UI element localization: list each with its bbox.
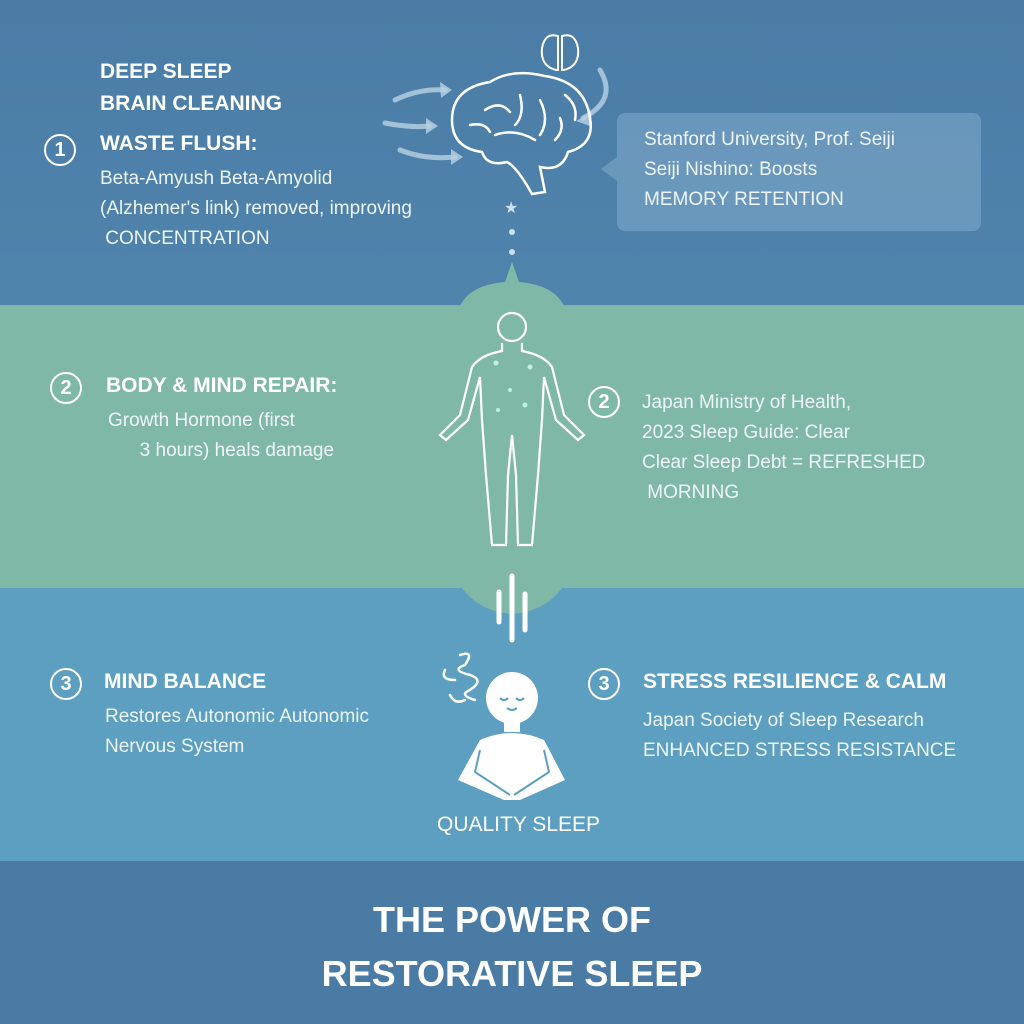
star and dots: ★ xyxy=(504,200,518,217)
item 1 left: waste flush: WASTE FLUSH: xyxy=(100,132,258,155)
item 2 right: Japan Ministry: Japan Ministry of Health, xyxy=(642,392,851,413)
item 3 left: mind balance xyxy=(50,668,369,757)
item 2 right: Japan Ministry: MORNING xyxy=(647,482,739,503)
item 2 left: body & mind repair xyxy=(50,372,337,461)
band: top blue xyxy=(0,0,1024,306)
item 3 left: mind balance: Restores Autonomic Autonomic xyxy=(105,706,369,727)
band: green xyxy=(0,305,1024,589)
item 3 right: stress resilience xyxy=(588,668,956,761)
item 2 left: body & mind repair: 2 xyxy=(60,377,72,399)
title: RESTORATIVE SLEEP xyxy=(322,953,702,994)
item 2 right: Japan Ministry: 2 xyxy=(598,391,610,413)
item 1 left: waste flush xyxy=(44,132,412,249)
item 3 right: stress resilience: ENHANCED STRESS RESISTANCE xyxy=(643,740,956,761)
icon: brain with arrows xyxy=(382,34,609,196)
item 2 right: Japan Ministry: 2023 Sleep Guide: Clear xyxy=(642,422,850,443)
label: quality sleep: QUALITY SLEEP xyxy=(437,813,600,836)
item 3 left: mind balance: Nervous System xyxy=(105,736,244,757)
icon: meditating person xyxy=(442,652,565,800)
icon: human body xyxy=(438,312,586,546)
callout: Stanford: MEMORY RETENTION xyxy=(644,189,844,210)
heading: deep sleep brain cleaning: DEEP SLEEP xyxy=(100,60,232,83)
callout: Stanford: Seiji Nishino: Boosts xyxy=(644,159,817,180)
callout: Stanford: Stanford University, Prof. Seiji xyxy=(644,129,895,150)
item 3 left: mind balance: MIND BALANCE xyxy=(104,670,266,693)
callout: Stanford xyxy=(617,113,981,231)
item 2 right: Japan Ministry: Clear Sleep Debt = REFRESHED xyxy=(642,452,926,473)
item 3 left: mind balance: 3 xyxy=(60,673,72,695)
item 3 right: stress resilience: 3 xyxy=(598,673,610,695)
title: THE POWER OF xyxy=(373,899,651,940)
item 1 left: waste flush: 1 xyxy=(54,139,66,161)
heading: deep sleep brain cleaning xyxy=(100,60,282,115)
item 2 left: body & mind repair: Growth Hormone (first xyxy=(108,410,295,431)
item 2 left: body & mind repair: 3 hours) heals damage xyxy=(140,440,334,461)
item 2 left: body & mind repair: BODY & MIND REPAIR: xyxy=(106,374,337,397)
band: bottom xyxy=(0,861,1024,1024)
band: light blue xyxy=(0,588,1024,862)
item 1 left: waste flush: Beta-Amyush Beta-Amyolid xyxy=(100,168,332,189)
item 1 left: waste flush: (Alzhemer's link) removed, improving xyxy=(100,198,412,219)
item 3 right: stress resilience: Japan Society of Sleep Research xyxy=(643,710,924,731)
item 3 right: stress resilience: STRESS RESILIENCE & CALM xyxy=(643,670,946,693)
icon: wave lines xyxy=(496,574,528,642)
item 2 right: Japan Ministry xyxy=(588,386,926,503)
item 1 left: waste flush: CONCENTRATION xyxy=(105,228,270,249)
heading: deep sleep brain cleaning: BRAIN CLEANING xyxy=(100,92,282,115)
title xyxy=(322,899,702,994)
